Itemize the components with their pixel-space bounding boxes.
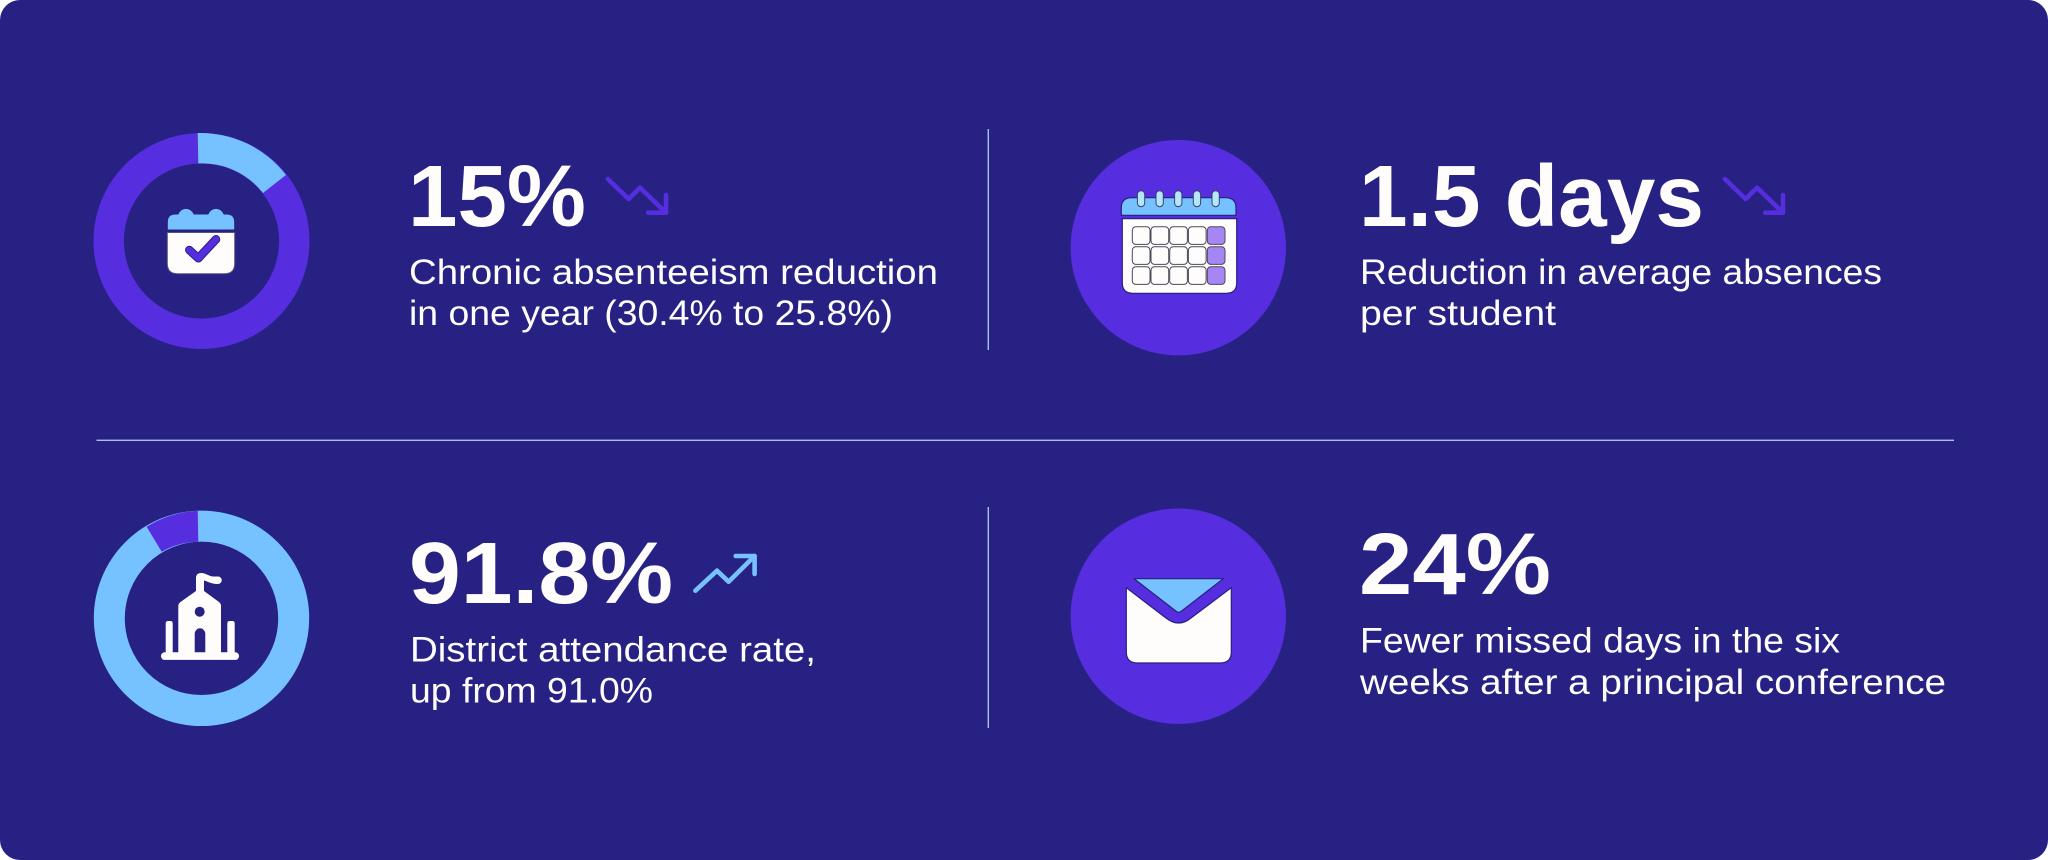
heading: 91.8%: 91.8% [409,525,673,622]
description: principal conference: weeks after a principal conference [1359,663,1946,702]
arrow head: trending down [648,195,666,213]
icon circle [1071,508,1286,724]
panel: average absences [1071,140,1882,355]
donut chart: 15 percent [109,133,294,334]
description: chronic absenteeism: Chronic absenteeism reduction [409,253,938,292]
heading: 15%: 15% [408,148,586,245]
description: chronic absenteeism: in one year (30.4% to 25.8%) [409,294,893,333]
arrow: trending down [608,179,666,213]
icon: school building [161,573,239,660]
icon circle [1071,140,1286,355]
icon: wall calendar [1121,191,1237,293]
heading: 1.5 days: 1.5 days [1359,148,1704,245]
description: principal conference [1359,622,1946,702]
panel: chronic absenteeism [109,133,938,334]
arrow: trending up [695,556,755,591]
heading: 24%: 24% [1359,516,1551,613]
panel: principal conference [1071,508,1946,724]
description: average absences: Reduction in average absences [1360,253,1882,292]
icon: calendar with check mark [167,208,235,274]
description: average absences: per student [1360,294,1556,333]
description: district attendance: District attendance rate, [410,631,816,670]
description: district attendance [410,631,816,711]
donut chart: 91.8 percent [109,511,294,710]
description: district attendance: up from 91.0% [410,672,653,711]
description: average absences [1360,253,1882,333]
icon: envelope [1126,579,1231,663]
description: principal conference: Fewer missed days in the six [1360,622,1841,661]
description: chronic absenteeism [409,253,938,333]
panel: district attendance [109,511,816,711]
arrow: trending down [1725,179,1783,213]
